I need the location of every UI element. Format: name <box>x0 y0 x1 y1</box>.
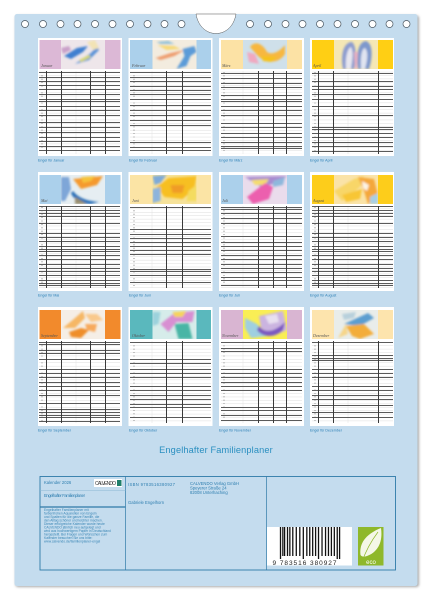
month label: Oktober <box>132 333 146 338</box>
description text: CALVENDO jährlich neu aufgelegt und <box>44 526 101 530</box>
caption: Engel für November <box>219 428 252 432</box>
caption: Engel für August <box>310 294 336 298</box>
description text: Kalender besuchen Sie uns bitte: <box>44 536 92 540</box>
title: Engelhafter Familienplaner <box>159 445 273 455</box>
imprint box <box>40 476 396 570</box>
month label: August <box>312 198 325 203</box>
publisher logo: CALVENDO <box>95 481 116 487</box>
edition label: Kalender 2026 <box>44 480 72 485</box>
month card: August <box>310 172 394 291</box>
month label: September <box>41 333 58 338</box>
caption: Engel für Juli <box>219 294 240 298</box>
barcode <box>267 527 352 567</box>
description text: Engelhafter Familienplaner mit <box>44 508 89 512</box>
caption: Engel für Dezember <box>310 428 343 432</box>
month card: Dezember <box>310 307 394 426</box>
month card: März <box>219 38 304 156</box>
author: Gabriele Engelhorn <box>128 500 165 505</box>
description text: farbenfrohen Aquarellen von Engeln <box>44 512 97 516</box>
icon: eco leaf <box>358 527 384 566</box>
calendar name: Engelhafter Familienplaner <box>44 493 86 498</box>
month card: Oktober <box>128 307 212 426</box>
month label: November <box>221 333 239 338</box>
description text: Dieser erfolgreiche Kalender wurde heute <box>44 522 105 526</box>
publisher address: 82008 Unterhaching <box>190 490 228 495</box>
description text: wird aus hochwertigem Papier in Deutschland <box>44 529 111 533</box>
caption: Engel für Januar <box>38 158 65 162</box>
publisher logo <box>94 479 122 487</box>
month label: Januar <box>41 63 53 68</box>
month card: Mai <box>38 172 122 291</box>
caption: Engel für Mai <box>38 294 59 298</box>
month card: September <box>38 307 122 426</box>
month card: November <box>219 307 304 426</box>
description text: und Spalten für die ganze Familie, die <box>44 515 100 519</box>
caption: Engel für September <box>38 428 72 432</box>
binding notch <box>196 14 236 34</box>
month label: Mai <box>40 198 47 203</box>
caption: Engel für Juni <box>129 294 151 298</box>
caption: Engel für April <box>310 158 333 162</box>
month label: Juli <box>222 198 228 203</box>
publisher address: Speyerer Straße 24 <box>190 486 227 490</box>
barcode: 9 783516 380927 <box>272 560 337 567</box>
icon: eco leaf: eco <box>366 560 376 566</box>
caption: Engel für März <box>219 158 243 162</box>
description text: den Alltag schöner und leichter machen. <box>44 518 103 522</box>
month label: Dezember <box>312 333 330 338</box>
month label: Juni <box>132 198 139 203</box>
caption: Engel für Oktober <box>129 428 158 432</box>
publisher address: CALVENDO Verlag GmbH <box>190 481 239 486</box>
month label: März <box>221 63 231 68</box>
month card: Juli <box>219 172 304 291</box>
binding holes <box>22 20 410 28</box>
caption: Engel für Februar <box>129 158 158 162</box>
description text: hergestellt. Bei Fragen und Wünschen zum <box>44 532 107 536</box>
month card: Februar <box>128 38 212 156</box>
description text: www.calvendo.de/familienplaner-engel <box>44 540 101 544</box>
month card: Juni <box>128 172 212 291</box>
month label: April <box>312 63 322 68</box>
month card: Januar <box>38 38 122 156</box>
month card: April <box>310 38 394 156</box>
month label: Februar <box>131 63 146 68</box>
ISBN: ISBN 9783516380927 <box>128 482 176 487</box>
